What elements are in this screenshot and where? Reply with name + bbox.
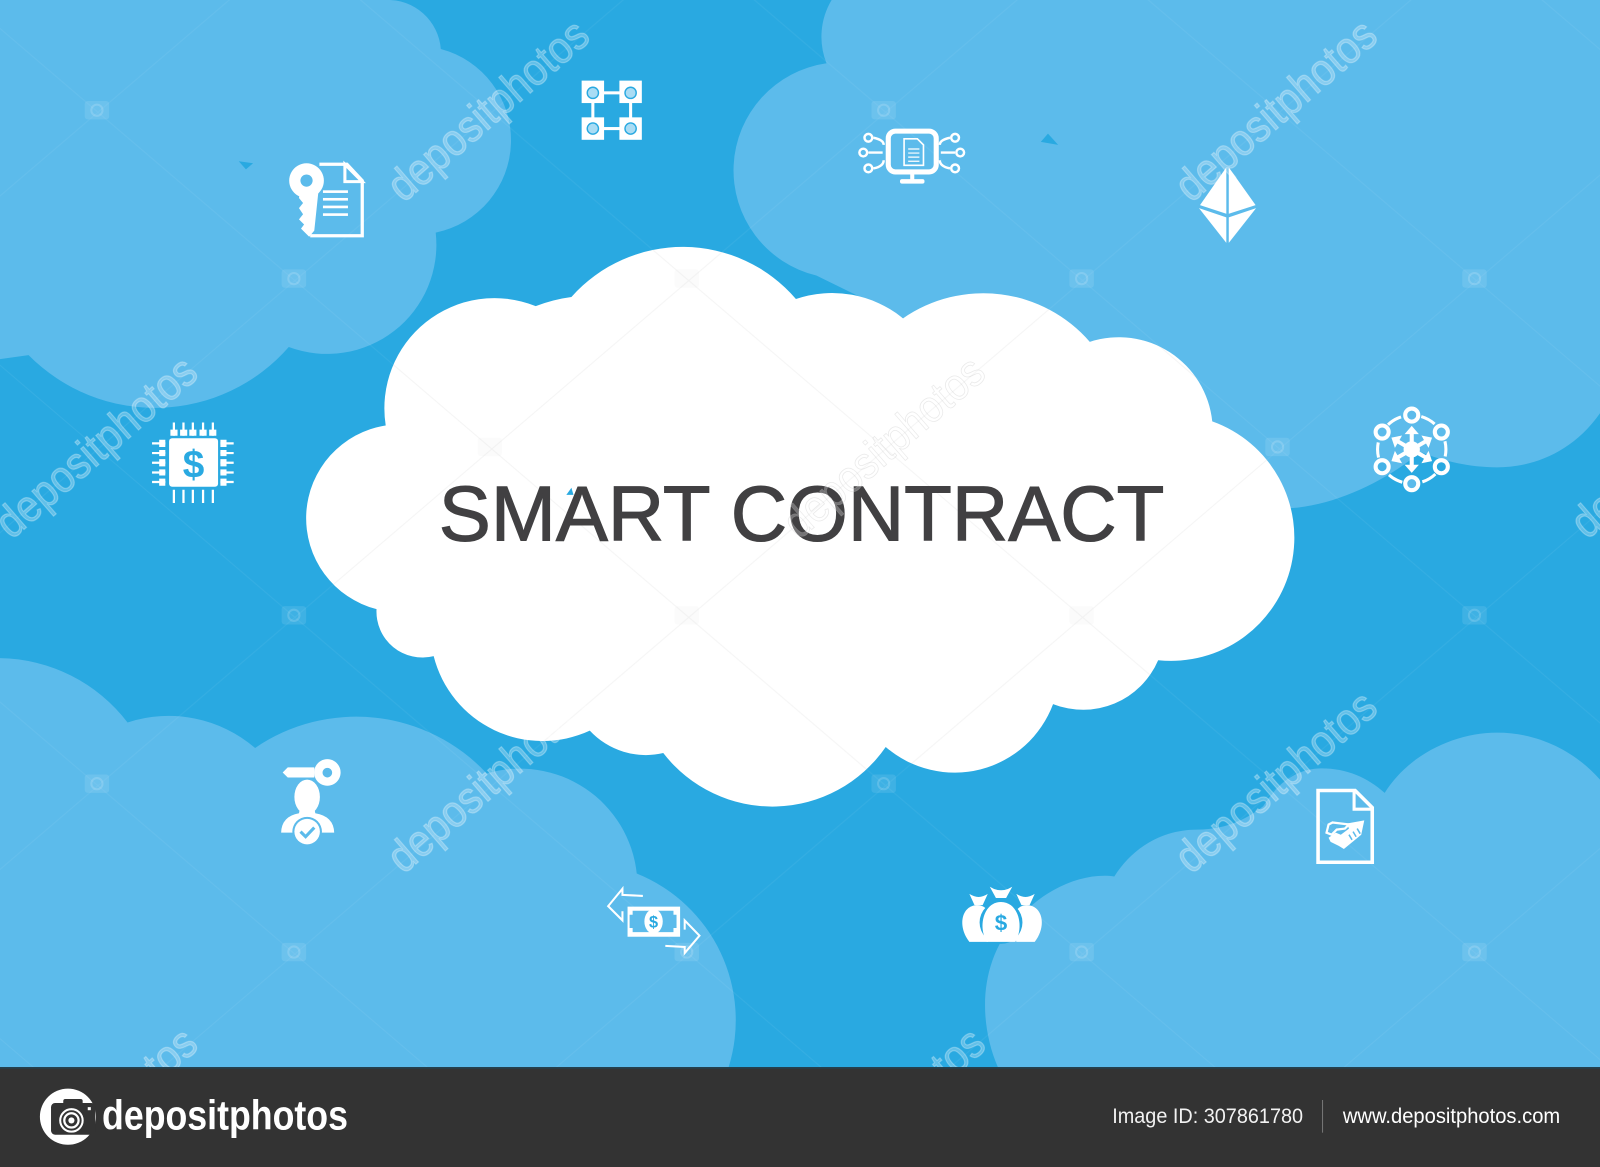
cloud: bottom left	[0, 658, 736, 1067]
icon: ethereum diamond	[1199, 167, 1256, 243]
central cloud	[306, 247, 1294, 807]
watermark: repeated text: depositphotos	[377, 680, 599, 882]
footer bar	[0, 1067, 1600, 1167]
watermark: repeated text: depositphotos	[773, 345, 995, 548]
watermark: small camera marks	[85, 101, 1487, 961]
icon: key and document	[289, 163, 362, 237]
icon: dollar chip: $	[183, 444, 205, 487]
icon: money transfer arrows: $	[649, 914, 658, 932]
footer website: www.depositphotos.com	[1342, 1105, 1560, 1128]
icon: money bags	[962, 887, 1042, 944]
icon: dollar chip	[152, 422, 234, 503]
cloud: bottom right	[985, 733, 1600, 1067]
icon: money transfer arrows	[608, 889, 699, 953]
footer logo mark: camera in circle	[40, 1089, 96, 1145]
footer image id: Image ID: 307861780	[1112, 1105, 1303, 1128]
watermark: repeated text: depositphotos	[1164, 680, 1386, 882]
icon: network hexagon	[1376, 409, 1448, 490]
icon: document with handshake	[1318, 791, 1372, 862]
footer logo text: depositphotos	[102, 1092, 348, 1139]
decorative triangle top left	[239, 161, 253, 169]
small triangle in title	[566, 488, 573, 495]
icon: frame with nodes	[582, 81, 642, 140]
title: SMART CONTRACT	[439, 469, 1164, 557]
cloud: top right	[734, 0, 1600, 508]
icon: money bags: $	[995, 911, 1008, 936]
icon: monitor document circuit	[859, 131, 964, 184]
icon: person with key	[281, 759, 341, 846]
faint lines on central cloud	[334, 250, 1267, 769]
cloud: top left	[0, 0, 511, 408]
decorative triangle top right	[1041, 134, 1058, 145]
footer divider	[1322, 1100, 1323, 1133]
